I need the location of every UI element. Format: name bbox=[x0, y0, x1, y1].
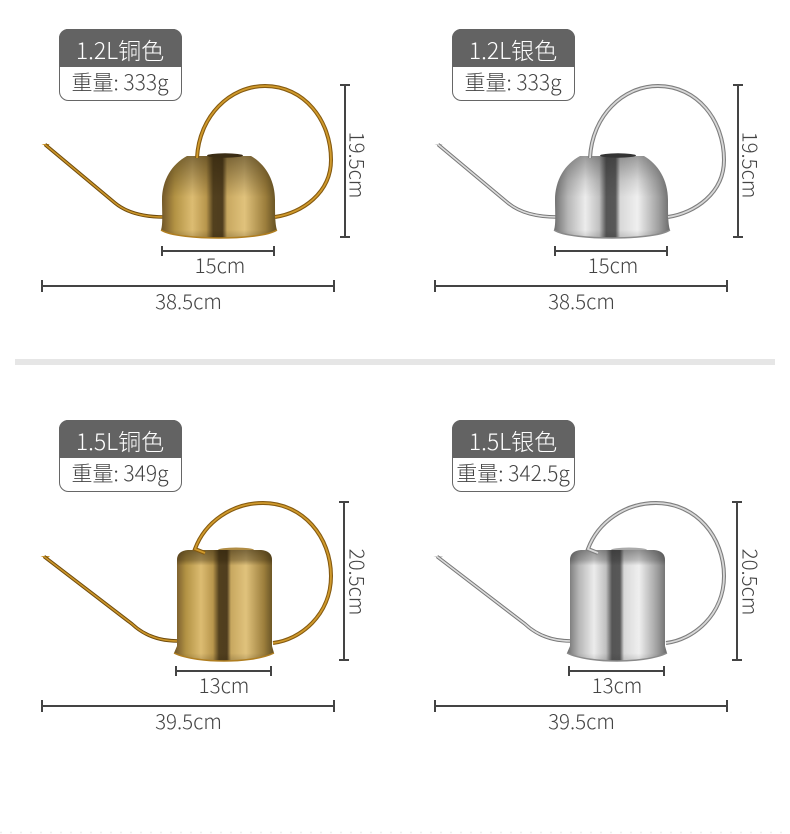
badge: 1.2L copper: 1.2L铜色 bbox=[76, 32, 164, 66]
dimension: height 19.5cm bbox=[340, 85, 374, 237]
badge: 1.2L copper: 重量: 333g bbox=[71, 67, 169, 97]
badge: 1.5L copper bbox=[59, 420, 182, 492]
badge: 1.5L copper: 重量: 349g bbox=[71, 458, 169, 488]
dimension: length 38.5cm: 38.5cm bbox=[155, 285, 222, 315]
watering can: 1.2L silver bbox=[434, 86, 724, 238]
watering can: 1.5L silver bbox=[434, 503, 724, 661]
dimension: height 20.5cm bbox=[732, 502, 766, 660]
dimension: base 13cm: 13cm bbox=[592, 669, 642, 699]
dimension: height 19.5cm: 19.5cm bbox=[344, 132, 374, 198]
badge: 1.5L silver: 重量: 342.5g bbox=[456, 458, 570, 488]
dimension: length 39.5cm bbox=[42, 700, 334, 735]
badge: 1.5L silver: 1.5L银色 bbox=[469, 423, 557, 457]
panel: 1.2L copper bbox=[42, 29, 374, 315]
dimension: height 20.5cm bbox=[339, 502, 374, 660]
panel: 1.2L silver bbox=[434, 29, 766, 315]
dimension: base 15cm: 15cm bbox=[195, 249, 245, 279]
dimension: height 20.5cm: 20.5cm bbox=[736, 549, 766, 615]
watering can: 1.5L copper bbox=[40, 503, 331, 661]
dimension: length 38.5cm bbox=[42, 280, 334, 315]
dimension: base 15cm: 15cm bbox=[588, 249, 638, 279]
dimension: length 39.5cm bbox=[435, 700, 727, 735]
dimension: base 15cm bbox=[555, 246, 667, 279]
dimension: height 19.5cm bbox=[733, 85, 766, 237]
dimension: length 39.5cm: 39.5cm bbox=[155, 705, 222, 735]
badge: 1.2L silver bbox=[452, 29, 575, 100]
dimension: base 13cm bbox=[569, 666, 664, 699]
dimension: length 39.5cm: 39.5cm bbox=[548, 705, 615, 735]
dimension: height 20.5cm: 20.5cm bbox=[344, 549, 374, 615]
badge: 1.5L copper: 1.5L铜色 bbox=[76, 423, 164, 457]
dimension: base 15cm bbox=[162, 246, 274, 279]
dimension: length 38.5cm bbox=[435, 280, 727, 315]
panel: 1.5L silver bbox=[434, 420, 766, 735]
watering can: 1.2L copper bbox=[42, 86, 331, 238]
dimension: base 13cm: 13cm bbox=[199, 669, 249, 699]
dimension: base 13cm bbox=[176, 666, 271, 699]
panel: 1.5L copper bbox=[40, 420, 374, 735]
badge: 1.2L silver: 重量: 333g bbox=[464, 67, 562, 97]
badge: 1.2L copper bbox=[59, 29, 182, 100]
dimension: height 19.5cm: 19.5cm bbox=[736, 132, 766, 198]
dimension: length 38.5cm: 38.5cm bbox=[548, 285, 615, 315]
badge: 1.5L silver bbox=[452, 420, 575, 492]
badge: 1.2L silver: 1.2L银色 bbox=[469, 32, 557, 66]
